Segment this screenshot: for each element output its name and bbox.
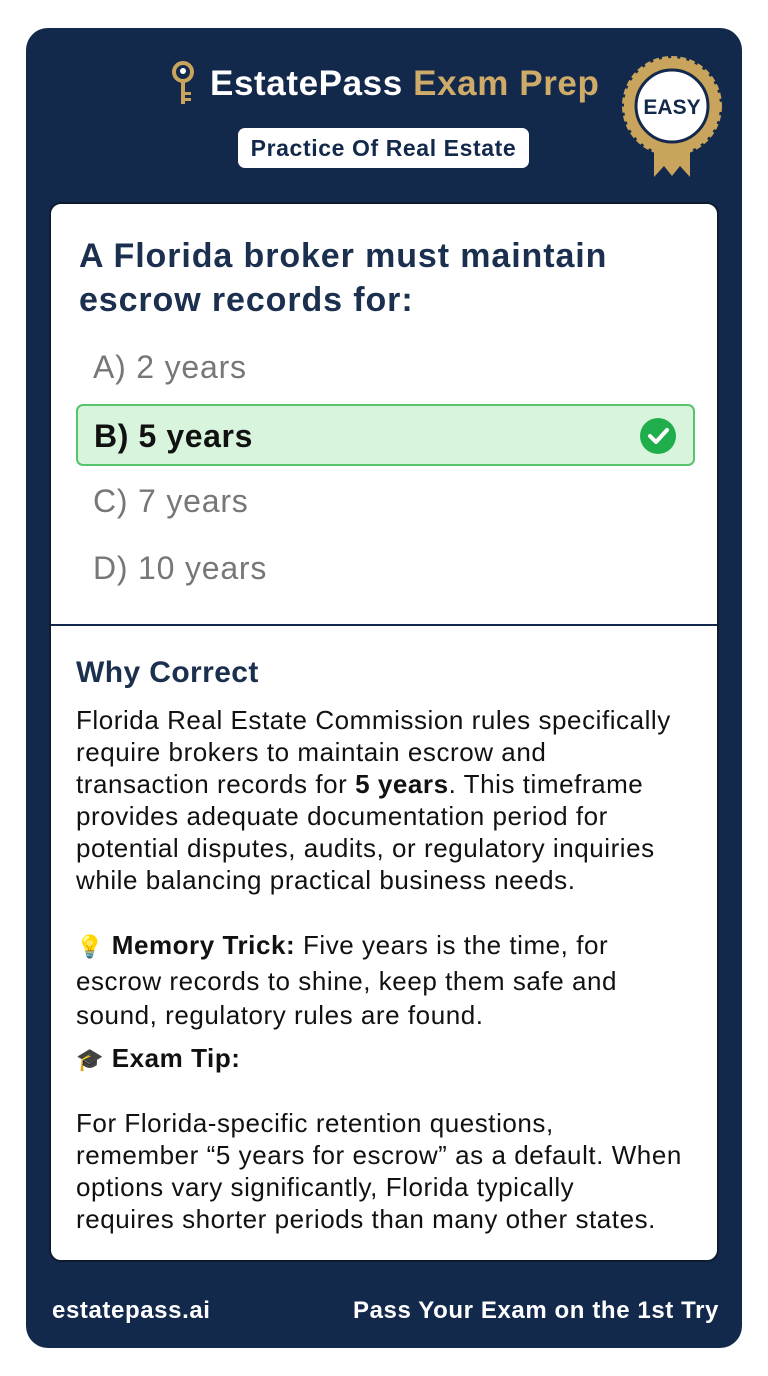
option B correct: [76, 404, 695, 466]
exam tip text: For Florida-specific retention questions,: [76, 1108, 554, 1138]
exam tip text: requires shorter periods than many other states.: [76, 1204, 656, 1234]
option C: C) 7 years: [93, 483, 249, 519]
explanation text: Florida Real Estate Commission rules specifically: [76, 705, 671, 735]
badge: EASY: EASY: [643, 96, 701, 119]
badge: EASY: [622, 56, 722, 177]
question heading: escrow records for:: [79, 281, 414, 319]
footer right: Pass Your Exam on the 1st Try: [353, 1297, 719, 1324]
memory trick: sound, regulatory rules are found.: [76, 1000, 484, 1030]
option A: A) 2 years: [93, 349, 247, 385]
category pill: [238, 128, 529, 168]
memory trick: [76, 930, 617, 1030]
exam tip text: [76, 1108, 682, 1234]
category pill: Practice Of Real Estate: [251, 135, 516, 161]
question heading: A Florida broker must maintain: [79, 237, 607, 275]
explanation text: [76, 705, 671, 895]
memory trick: 💡 Memory Trick: Five years is the time, for: [76, 930, 608, 960]
header title: EstatePass Exam Prep: [210, 64, 599, 103]
question heading: [79, 237, 607, 319]
explanation text: require brokers to maintain escrow and: [76, 737, 546, 767]
question card: [49, 202, 719, 1262]
memory trick: escrow records to shine, keep them safe and: [76, 966, 617, 996]
explanation text: while balancing practical business needs.: [76, 865, 576, 895]
explanation text: provides adequate documentation period for: [76, 801, 608, 831]
footer left: estatepass.ai: [52, 1297, 211, 1324]
explanation text: potential disputes, audits, or regulatory inquiries: [76, 833, 655, 863]
exam tip text: options vary significantly, Florida typically: [76, 1172, 574, 1202]
explanation text: transaction records for 5 years. This timeframe: [76, 769, 643, 799]
icon: key: [172, 61, 194, 104]
option D: D) 10 years: [93, 550, 267, 586]
option B correct: B) 5 years: [94, 418, 253, 454]
exam tip text: remember “5 years for escrow” as a default. When: [76, 1140, 682, 1170]
why correct heading: Why Correct: [76, 656, 259, 689]
icon: check: [640, 418, 676, 454]
exam tip heading: 🎓 Exam Tip:: [76, 1043, 240, 1073]
